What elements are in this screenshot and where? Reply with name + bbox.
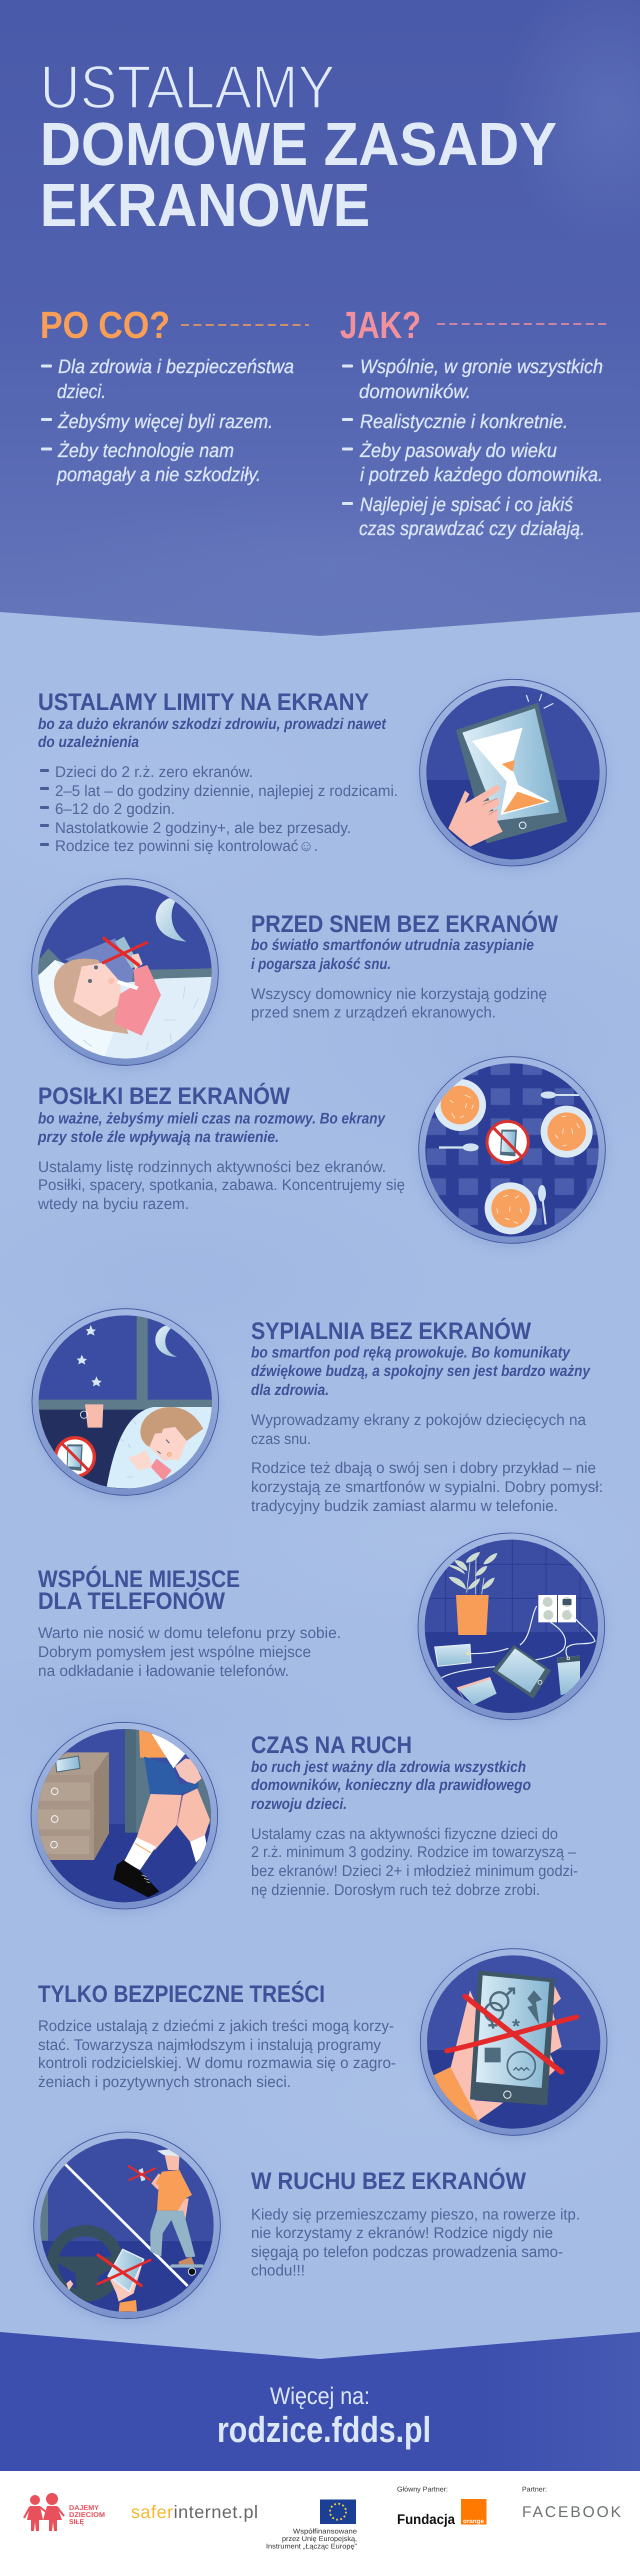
title: DOMOWE ZASADY: [40, 110, 557, 178]
panel: posiłki: [38, 1056, 606, 1248]
logo strip: [0, 2471, 640, 2560]
body text: Ustalamy listę rodzinnych aktywności bez ekranów.: [38, 1159, 386, 1176]
header panel: [0, 0, 640, 636]
subheading: przy stole źle wpływają na trawienie.: [37, 1129, 279, 1146]
icon: tablet with hourglass: [418, 678, 608, 870]
title: EKRANOWE: [40, 171, 370, 239]
heading: W RUCHU BEZ EKRANÓW: [251, 2167, 526, 2195]
panel: bezpieczne treści: [38, 1948, 608, 2140]
list: po co: Żebyśmy więcej byli razem.: [57, 411, 273, 433]
column: po co: [40, 305, 309, 486]
panel: w ruchu: [32, 2132, 579, 2323]
logo: facebook: FACEBOOK: [522, 2504, 622, 2521]
EU funding note: Współfinansowane: [293, 2528, 357, 2536]
EU funding note: przez Unię Europejską,: [282, 2535, 357, 2543]
column: jak: [340, 305, 607, 540]
logo: fundacja orange: Fundacja: [397, 2511, 455, 2527]
body text: korzystają ze smartfonów w sypialni. Dobry pomysł:: [251, 1479, 603, 1496]
list: po co: [56, 356, 294, 486]
logo: dajemy dzieciom siłę: [24, 2493, 105, 2531]
list: po co: Dla zdrowia i bezpieczeństwa: [58, 356, 294, 378]
subheading: bo ruch jest ważny dla zdrowia wszystkich: [251, 1759, 526, 1776]
list: po co: dzieci.: [57, 381, 106, 403]
body text: Wyprowadzamy ekrany z pokojów dziecięcych na: [251, 1412, 586, 1429]
body text: tradycyjny budzik zamiast alarmu w telefonie.: [251, 1498, 558, 1515]
body text: [251, 1412, 603, 1515]
subheading: bo za dużo ekranów szkodzi zdrowiu, prowadzi nawet: [38, 716, 387, 733]
body text: [251, 2206, 580, 2280]
logo: fundacja orange: [397, 2486, 486, 2527]
body text: czas snu.: [251, 1431, 311, 1448]
body text: na odkładanie i ładowanie telefonów.: [38, 1663, 289, 1680]
panel: limity: [38, 678, 608, 870]
body text: bez ekranów! Dzieci 2+ i młodzież minimum godzi-: [251, 1863, 578, 1880]
heading: WSPÓLNE MIEJSCE: [38, 1565, 240, 1593]
body text: chodu!!!: [251, 2262, 305, 2280]
panel: czas na ruch: [30, 1722, 578, 1914]
list: jak: i potrzeb każdego domownika.: [360, 464, 603, 486]
heading: jak: JAK?: [340, 305, 421, 347]
logo: fundacja orange: Główny Partner:: [397, 2486, 448, 2494]
logo: facebook: Partner:: [522, 2486, 547, 2494]
subheading: bo światło smartfonów utrudnia zasypianie: [251, 937, 534, 954]
panel: wspólne miejsce: [38, 1521, 620, 1732]
list: jak: Żeby pasowały do wieku: [359, 440, 557, 462]
body text: stać. Towarzysza najmłodszym i instalują programy: [38, 2037, 381, 2054]
logo: facebook: [522, 2486, 622, 2521]
body text: sięgają po telefon podczas prowadzenia samo-: [251, 2244, 563, 2261]
body text: Posiłki, spacery, spotkania, zabawa. Koncentrujemy się: [38, 1177, 405, 1194]
bullet list: [40, 764, 398, 855]
heading: USTALAMY LIMITY NA EKRANY: [38, 689, 369, 716]
body text: nę dziennie. Dorosłym ruch też dobrze zrobi.: [251, 1882, 540, 1899]
subheading: dla zdrowia.: [251, 1382, 329, 1399]
body text: Rodzice też dbają o swój sen i dobry przykład – nie: [251, 1460, 596, 1477]
body text: [251, 986, 547, 1022]
subheading: i pogarsza jakość snu.: [251, 956, 391, 973]
logo: EU flag: [320, 2500, 356, 2524]
logo: dajemy dzieciom siłę: DAJEMY: [69, 2505, 99, 2512]
subheading: bo smartfon pod ręką prowokuje. Bo komunikaty: [251, 1344, 571, 1362]
list: po co: pomagały a nie szkodziły.: [56, 464, 261, 486]
heading: PRZED SNEM BEZ EKRANÓW: [251, 910, 558, 938]
subheading: rozwoju dzieci.: [251, 1796, 347, 1813]
heading: CZAS NA RUCH: [251, 1732, 412, 1759]
list: jak: Realistycznie i konkretnie.: [360, 411, 568, 433]
icon: sleeping child: [31, 1308, 220, 1500]
EU funding note: Instrument „Łącząc Europę”: [266, 2544, 358, 2550]
footer band: [0, 2332, 640, 2471]
icon: phone with crossed content: *: [512, 2015, 520, 2037]
heading: TYLKO BEZPIECZNE TREŚCI: [38, 1980, 325, 2008]
subheading: [251, 1759, 531, 1813]
icon: child in bed with phone: [30, 878, 220, 1070]
body text: przed snem z urządzeń ekranowych.: [251, 1004, 496, 1022]
body text: 2 r.ż. minimum 3 godziny. Rodzice im towarzyszą –: [251, 1844, 576, 1861]
EU funding note: [266, 2528, 358, 2550]
panel: przed snem: [20, 870, 558, 1080]
body text: Wszyscy domownicy nie korzystają godzinę: [251, 986, 547, 1003]
subheading: [37, 1110, 386, 1146]
subheading: [251, 937, 534, 973]
logo: dajemy dzieciom siłę: DZIECIOM: [69, 2512, 105, 2519]
body text: nie korzystamy z ekranów! Rodzice nigdy nie: [251, 2225, 553, 2242]
icon: table with plates: [418, 1056, 606, 1248]
title: USTALAMY: [40, 53, 335, 121]
body text: [38, 2018, 396, 2091]
logo: saferinternet.pl: saferinternet.pl: [131, 2502, 258, 2522]
bullet list: 6–12 do 2 godzin.: [55, 801, 175, 818]
subheading: [38, 716, 387, 751]
subheading: domowników, konieczny dla prawidłowego: [251, 1777, 531, 1794]
subheading: dźwiękowe budzą, a spokojny sen jest bardzo ważny: [251, 1363, 591, 1380]
heading: DLA TELEFONÓW: [38, 1587, 225, 1615]
body text: Dobrym pomysłem jest wspólne miejsce: [38, 1644, 311, 1661]
heading: POSIŁKI BEZ EKRANÓW: [38, 1082, 290, 1110]
heading: po co: PO CO?: [40, 305, 170, 347]
body text: Ustalamy czas na aktywności fizyczne dzieci do: [251, 1826, 558, 1843]
heading: SYPIALNIA BEZ EKRANÓW: [251, 1317, 531, 1345]
background blotches: [0, 680, 640, 2220]
body text: żeniach i pozytywnych stronach sieci.: [38, 2074, 291, 2091]
body text: Kiedy się przemieszczamy pieszo, na rowerze itp.: [251, 2206, 580, 2224]
bullet list: Dzieci do 2 r.ż. zero ekranów.: [55, 764, 253, 781]
bullet list: Rodzice tez powinni się kontrolować☺.: [55, 838, 318, 855]
body text: Warto nie nosić w domu telefonu przy sobie.: [38, 1625, 341, 1642]
icon: walking child and dresser: [30, 1722, 218, 1914]
logo: dajemy dzieciom siłę: SIŁĘ: [69, 2519, 84, 2526]
icon: charging devices: [416, 1532, 606, 1724]
bullet list: Nastolatkowie 2 godziny+, ale bez przesady.: [55, 820, 351, 837]
icon: skater and steering wheel: [32, 2132, 222, 2323]
subheading: bo ważne, żebyśmy mieli czas na rozmowy. Bo ekrany: [38, 1110, 386, 1128]
title: [40, 53, 557, 239]
body text: Rodzice ustalają z dziećmi z jakich treści mogą korzy-: [38, 2018, 394, 2035]
body text: wtedy na byciu razem.: [37, 1196, 189, 1213]
heading: [38, 1565, 240, 1615]
subheading: [251, 1344, 591, 1399]
body text: [251, 1826, 578, 1899]
list: jak: czas sprawdzać czy działają.: [359, 518, 585, 540]
icon: phone with crossed content: [419, 1948, 608, 2140]
list: jak: [359, 356, 603, 540]
logo: fundacja orange: orange: [463, 2519, 485, 2525]
list: jak: Najlepiej je spisać i co jakiś: [360, 494, 573, 516]
list: jak: domowników.: [359, 381, 471, 403]
body text: [37, 1159, 405, 1213]
body text: [38, 1625, 341, 1680]
panel: sypialnia: [20, 1297, 603, 1515]
list: po co: Żeby technologie nam: [57, 440, 234, 462]
subheading: do uzależnienia: [38, 734, 139, 751]
call to action: Więcej na:: [270, 2383, 370, 2410]
bullet list: 2–5 lat – do godziny dziennie, najlepiej z rodzicami.: [55, 783, 398, 800]
body text: kontroli rodzicielskiej. W domu rozmawia się o zagro-: [38, 2055, 396, 2072]
website link: rodzice.fdds.pl: [217, 2409, 431, 2450]
list: jak: Wspólnie, w gronie wszystkich: [360, 356, 603, 378]
